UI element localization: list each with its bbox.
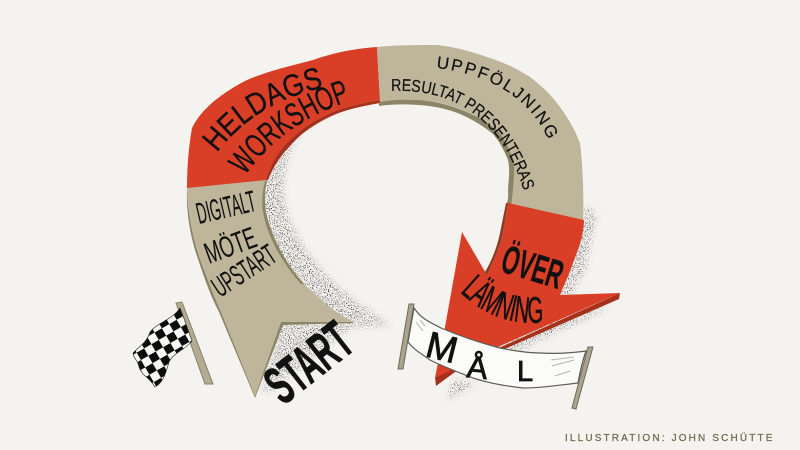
segment: start tail (tan) [187, 180, 354, 396]
segment: follow-up (tan) [377, 45, 583, 220]
text: möte: MÖTE [200, 221, 261, 271]
label: digitalt möte upstart: DIGITALT [193, 185, 259, 231]
label: heldags workshop [202, 68, 345, 172]
segment: workshop (red) [187, 47, 380, 188]
text: uppföljning: UPPFÖLJNING [438, 56, 558, 138]
tail edge shading [187, 180, 354, 398]
label: lämning: LÄMNING [461, 274, 542, 324]
workshop inner shadow edge [266, 100, 380, 180]
text: mål: MÅ L [422, 324, 533, 388]
banner cloth [408, 308, 586, 388]
checkered cloth [133, 308, 192, 387]
follow-up inner edge [379, 100, 514, 207]
flag pole [176, 302, 213, 384]
banner crease lines [416, 320, 574, 376]
left banner pole [398, 304, 414, 369]
arrow: process path [187, 45, 620, 398]
icon: checkered flag [133, 302, 213, 387]
text: workshop: WORKSHOP [226, 81, 345, 172]
icon: finish banner [398, 304, 593, 409]
credit: ILLUSTRATION: JOHN SCHÜTTE [565, 432, 775, 444]
label: över: ÖVER [496, 237, 569, 298]
label: start: START [253, 310, 364, 415]
right banner pole [572, 347, 593, 409]
stippled shadow [258, 108, 612, 400]
segment: handover arrow head (red) [435, 203, 620, 378]
text: upstart: UPSTART [206, 239, 283, 304]
text: resultat presenteras: RESULTAT PRESENTERAS [392, 79, 534, 190]
text: heldags: HELDAGS [202, 68, 322, 152]
label: uppföljning, resultat presenteras [392, 56, 558, 190]
label: digitalt möte upstart [193, 185, 283, 304]
arrow head shadow [435, 293, 620, 386]
arrow head left edge [485, 203, 508, 275]
